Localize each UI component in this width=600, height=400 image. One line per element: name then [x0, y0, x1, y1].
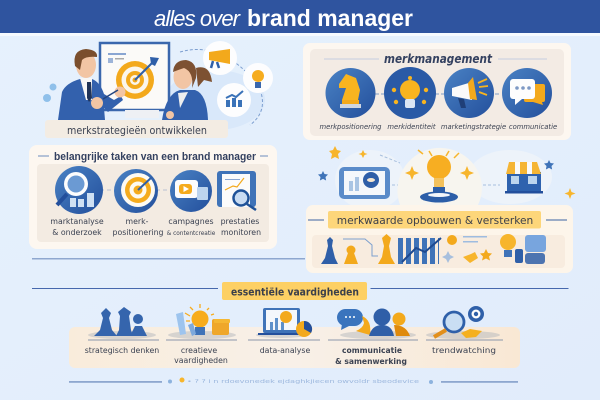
- panel: skills strip: [69, 304, 520, 368]
- skill labels: communicatie: [342, 346, 402, 355]
- icon: light bulb: [243, 63, 273, 93]
- icon: shop: [505, 162, 543, 194]
- icon: light bulb: [384, 67, 436, 119]
- panel: belangrijke taken: [29, 145, 277, 249]
- labels: monitoren: [221, 228, 261, 237]
- icon: creative bulb: [176, 304, 230, 336]
- title: [154, 5, 413, 31]
- illustration: strategy scene: [43, 41, 273, 130]
- label: merkstrategieën ontwikkelen: [45, 120, 228, 138]
- icon: bulb on stand: [405, 150, 474, 202]
- icon: bulb and bubble: [500, 234, 546, 264]
- footer note: • ? ? i n rdoevonedek ejdaghkjiecen owvoldr sbeodevice: [187, 379, 419, 385]
- skill labels: strategisch denken: [85, 346, 159, 355]
- icon: growth chart: [217, 83, 251, 117]
- header banner: [0, 0, 600, 36]
- icon: stars and coin: [442, 235, 492, 263]
- skill labels: & samenwerking: [335, 357, 407, 366]
- title: alles over: [154, 6, 242, 31]
- labels: [320, 123, 557, 131]
- icon: target: [114, 169, 158, 213]
- icon: laptop chart: [258, 308, 312, 337]
- man presenter: [58, 49, 126, 120]
- stars: [318, 146, 576, 199]
- footer note: [69, 378, 518, 385]
- heading: essentiële vaardigheden: essentiële vaardigheden: [231, 286, 359, 298]
- icon: trend magnifier: [434, 306, 484, 338]
- labels: & contentcreatie: [167, 231, 216, 237]
- skill labels: [85, 346, 496, 366]
- heading: essentiële vaardigheden: [222, 282, 367, 300]
- labels: merkidentiteit: [387, 123, 436, 131]
- label: merkstrategieën ontwikkelen: merkstrategieën ontwikkelen: [67, 125, 207, 137]
- labels: merkpositionering: [320, 123, 382, 131]
- skill labels: data-analyse: [260, 346, 310, 355]
- icon: chess knight: [326, 68, 376, 118]
- labels: communicatie: [509, 123, 557, 131]
- divider left: [32, 258, 305, 260]
- labels: positionering: [113, 228, 164, 237]
- heading band: merkwaarde opbouwen & versterken: [337, 215, 533, 227]
- chart: rising bars: [398, 238, 441, 264]
- heading: belangrijke taken van een brand manager: [54, 151, 257, 163]
- labels: campagnes: [168, 217, 214, 226]
- panel: merkwaarde opbouwen: [306, 205, 573, 273]
- icon: megaphone: [444, 68, 494, 118]
- divider: skills: [32, 288, 568, 289]
- icon: people and bubbles: [337, 308, 410, 336]
- icon: performance report: [217, 171, 256, 210]
- icon: speech bubbles: [502, 68, 552, 118]
- labels: marktanalyse: [50, 217, 104, 226]
- icon: campaigns: [170, 170, 212, 212]
- icon: screen: [339, 167, 390, 199]
- icon: chess pieces: [321, 234, 395, 264]
- skill labels: trendwatching: [432, 346, 496, 355]
- labels: prestaties: [221, 217, 259, 226]
- icon: chess pieces: [94, 307, 147, 336]
- labels: & onderzoek: [52, 228, 102, 237]
- labels: merk-: [126, 217, 149, 226]
- heading: merkmanagement: [384, 51, 493, 66]
- labels: [50, 217, 261, 237]
- skill labels: vaardigheden: [174, 356, 228, 365]
- labels: marketingstrategie: [441, 123, 506, 131]
- skill labels: creatieve: [181, 346, 217, 355]
- presentation board: [100, 43, 169, 118]
- heading band: [328, 211, 541, 228]
- illustration: brand value scene: [318, 146, 576, 210]
- icon: megaphone: [203, 41, 237, 75]
- panel: merkmanagement: [303, 43, 571, 140]
- title: brand manager: [247, 5, 413, 31]
- woman: [162, 60, 212, 120]
- icon: market analysis: [55, 166, 103, 214]
